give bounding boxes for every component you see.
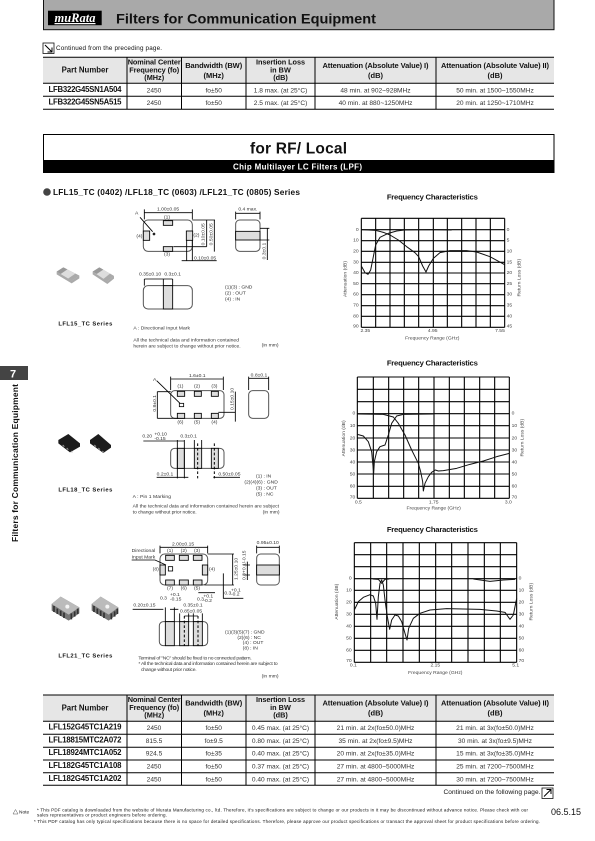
top view: 0.3 bbox=[197, 597, 204, 603]
table row: LFL18924MTC1A052: fo±35 bbox=[205, 750, 222, 758]
table row: LFL18924MTC1A052: LFL18924MTC1A052 bbox=[48, 748, 122, 757]
notes: (in mm) bbox=[263, 510, 280, 516]
table header labels: Insertion Loss bbox=[256, 695, 305, 704]
axis labels: 2.35 bbox=[360, 328, 370, 334]
axis labels: Return Loss (dB) bbox=[517, 258, 523, 297]
top view: -0.2 bbox=[231, 592, 240, 598]
notes: All the technical data and information contained bbox=[133, 337, 239, 343]
table row: LFL182G45TC1A202: 2450 bbox=[147, 776, 162, 784]
panel: LFL18 product and dimensions bbox=[58, 373, 280, 516]
table: LFL parts bbox=[43, 695, 554, 785]
bottom view bbox=[133, 592, 208, 646]
side tab label: Filters for Communication Equipment bbox=[10, 384, 20, 542]
axis labels: 70 bbox=[353, 303, 359, 309]
curves bbox=[354, 579, 517, 640]
terminal legend: (8) : IN bbox=[243, 645, 258, 651]
icon: caution triangle bbox=[13, 810, 18, 814]
page header band bbox=[44, 0, 554, 30]
table row: LFB322G45SN5A515: fo±50 bbox=[205, 100, 222, 107]
table row: LFL182G45TC1A202: 27 min. at 4800~5000MHz bbox=[337, 776, 414, 784]
axis labels: Attenuation (dB) bbox=[343, 261, 349, 297]
top view: (2) bbox=[194, 384, 200, 390]
axis labels: Attenuation (dB) bbox=[341, 420, 347, 456]
bottom view: -0.15 bbox=[170, 597, 182, 603]
top view: +0.1 bbox=[231, 587, 241, 593]
notes bbox=[138, 655, 279, 679]
top view: A bbox=[153, 377, 157, 383]
axis labels: 10 bbox=[507, 249, 512, 255]
axis labels: 0 bbox=[353, 411, 356, 417]
label: LFL15 series: LFL15_TC Series bbox=[58, 321, 112, 327]
axis labels: 70 bbox=[346, 658, 352, 664]
notes: A : Directional Input Mark bbox=[133, 325, 190, 331]
side view: 0.95±0.10 bbox=[257, 540, 279, 546]
bottom view bbox=[142, 431, 241, 478]
panel: LFL15 product and dimensions bbox=[57, 206, 279, 350]
table header labels: (dB) bbox=[488, 709, 503, 718]
axis labels: 20 bbox=[350, 435, 356, 441]
notes: A : Pin 1 Marking bbox=[133, 494, 171, 500]
top view: (3) bbox=[164, 251, 170, 257]
label: LFL18 series: LFL18_TC Series bbox=[58, 487, 112, 493]
date stamp: 06.5.15 bbox=[551, 807, 581, 817]
footer note: * This PDF catalog has only typical specifications because there is no space for detailed specifications. Therefore, please approve our product specifications or transact the approval sheet for product specifications before ordering. bbox=[34, 819, 540, 824]
table row: LFL152G45TC1A219 bbox=[48, 722, 534, 732]
table row: LFB322G45SN5A515: 40 min. at 880~1250MHz bbox=[339, 100, 412, 107]
top view: A bbox=[135, 211, 139, 217]
axis labels: Frequency Range (GHz) bbox=[405, 336, 460, 342]
top view: 1.25±0.10 bbox=[233, 558, 239, 580]
table header labels: (MHz) bbox=[203, 71, 224, 80]
axis labels: 20 bbox=[353, 249, 359, 255]
table row: LFL182G45TC1A108: 27 min. at 4800~5000MHz bbox=[337, 764, 414, 770]
notes: herein are subject to change without prior notice. bbox=[133, 344, 241, 350]
axis labels: 45 bbox=[507, 324, 512, 330]
table row: LFB322G45SN5A515: 20 min. at 1250~1710MHz bbox=[456, 100, 534, 107]
table header labels: Part Number bbox=[62, 703, 108, 712]
logo: muRata: muRata bbox=[54, 11, 96, 25]
terminal legend: (3) : OUT bbox=[256, 485, 277, 491]
side view bbox=[236, 206, 269, 260]
terminal legend: (1)(3) : GND bbox=[225, 285, 253, 291]
table header labels: Attenuation (Absolute Value) II) bbox=[441, 699, 550, 708]
axis labels: Attenuation (dB) bbox=[334, 583, 340, 620]
series heading with bullet: LFL15_TC (0402) /LFL18_TC (0603) /LFL21_TC (0805) Series bbox=[53, 187, 300, 197]
axis labels: 0 bbox=[519, 576, 522, 582]
axis labels: 60 bbox=[353, 292, 359, 298]
photo: LFL15 chips bbox=[57, 267, 114, 284]
top view: (5) bbox=[194, 419, 200, 425]
table header labels: (dB) bbox=[368, 709, 383, 718]
bottom view: 0.3±0.1 bbox=[180, 434, 197, 440]
notes: (in mm) bbox=[262, 343, 279, 349]
axis labels: 80 bbox=[353, 313, 359, 319]
top view: 0.15±0.10 bbox=[229, 388, 235, 410]
bottom view: +0.1 bbox=[170, 592, 180, 598]
notes: to change without prior notice. bbox=[133, 510, 197, 516]
top view: (5) bbox=[194, 586, 200, 592]
top view: 1.00±0.05 bbox=[157, 206, 179, 212]
axis labels: 10 bbox=[519, 588, 524, 594]
axis labels: 0.5 bbox=[355, 499, 362, 505]
table row: LFB322G45SN1A504 bbox=[48, 85, 534, 94]
terminal legend: (2)(4)(6) : GND bbox=[244, 480, 278, 486]
top view: -0.2 bbox=[203, 598, 212, 604]
continued from preceding page note: Continued from the preceding page. bbox=[56, 45, 162, 52]
terminal legend bbox=[225, 285, 253, 302]
terminal legend bbox=[225, 629, 265, 651]
top view: 0.8±0.1 bbox=[152, 395, 158, 412]
footer note: * This PDF catalog is downloaded from the website of Murata Manufacturing co., ltd. Therefore, it's specifications are subject to change or our products in it may be discontinued without advance notice. Please check with our bbox=[37, 808, 529, 812]
panel: LFL21 frequency chart bbox=[334, 525, 535, 676]
axis labels: 10 bbox=[512, 423, 517, 429]
terminal legend: (2)(6) : NC bbox=[237, 635, 261, 641]
top view: (3) bbox=[194, 548, 200, 554]
axis labels: 30 bbox=[507, 292, 512, 298]
table header labels: (dB) bbox=[273, 710, 288, 720]
table row: LFL182G45TC1A108: 25 min. at 7200~7500MHz bbox=[456, 764, 534, 770]
bottom view: 0.35±0.1 bbox=[183, 603, 203, 609]
table row: LFL182G45TC1A202 bbox=[48, 774, 534, 784]
table row: LFB322G45SN1A504: 48 min. at 902~928MHz bbox=[340, 88, 411, 94]
axis labels: 60 bbox=[512, 484, 517, 490]
footer note: Note bbox=[19, 810, 29, 816]
table header labels: Frequency (fo) bbox=[129, 65, 180, 74]
axis labels: 30 bbox=[350, 447, 356, 453]
top view: Input Mark bbox=[132, 555, 156, 561]
table header labels: Bandwidth (BW) bbox=[185, 61, 243, 70]
axis labels: 70 bbox=[350, 495, 356, 501]
axis labels: 70 bbox=[519, 658, 524, 664]
axis labels: Frequency Range (GHz) bbox=[408, 670, 463, 676]
panel: LFL21 product and dimensions bbox=[52, 540, 279, 679]
axis labels: 35 bbox=[507, 303, 512, 309]
top view: Directional bbox=[132, 548, 155, 554]
top view: (4) bbox=[211, 419, 218, 425]
table row: LFL18815MTC2A072: 0.80 max. (at 25°C) bbox=[252, 737, 309, 745]
table header labels: (dB) bbox=[273, 73, 288, 82]
axis labels: 60 bbox=[519, 648, 524, 654]
continued on following page note bbox=[444, 788, 553, 798]
top view: 0.50±0.05 bbox=[209, 223, 215, 245]
curves bbox=[361, 230, 505, 274]
axis labels: 50 bbox=[346, 636, 352, 642]
side view bbox=[249, 373, 269, 418]
top view: (1) bbox=[164, 214, 170, 220]
table row: LFL18815MTC2A072: 35 min. at 2x(fo±9.5)MHz bbox=[339, 738, 412, 745]
bottom view: 0.35±0.10 bbox=[139, 272, 161, 278]
side view bbox=[257, 540, 279, 585]
axis labels: 40 bbox=[519, 624, 524, 630]
side view: 0.8±0.1 bbox=[251, 373, 267, 379]
axis labels: 30 bbox=[346, 612, 352, 618]
terminal legend: (2) : OUT bbox=[225, 291, 246, 297]
bottom view: 0.20±0.15 bbox=[133, 603, 156, 609]
axis labels: 5 bbox=[507, 238, 510, 244]
table header labels: Bandwidth (BW) bbox=[185, 699, 243, 708]
top view: (3) bbox=[211, 384, 218, 390]
axis labels: 30 bbox=[353, 259, 359, 265]
top view: (6) bbox=[181, 586, 187, 592]
table header labels: Attenuation (Absolute Value) I) bbox=[322, 61, 429, 70]
table row: LFL18924MTC1A052 bbox=[48, 748, 534, 758]
chart title: Frequency Characteristics bbox=[387, 192, 478, 201]
axis labels: 15 bbox=[507, 259, 512, 265]
section title box: for RF/ Local bbox=[43, 134, 554, 173]
grid bbox=[361, 218, 505, 327]
table row: LFB322G45SN5A515: 2.5 max. (at 25°C) bbox=[254, 99, 307, 107]
axis labels: 1.75 bbox=[429, 499, 439, 505]
axis labels bbox=[343, 227, 523, 342]
top view bbox=[152, 373, 235, 425]
label: LFL21 series: LFL21_TC Series bbox=[58, 653, 112, 659]
section title box: for RF/ Local: for RF/ Local bbox=[250, 140, 347, 158]
axis labels: 50 bbox=[519, 636, 524, 642]
table header labels bbox=[62, 58, 550, 82]
table row: LFL182G45TC1A202: LFL182G45TC1A202 bbox=[48, 774, 122, 783]
top view: 0.3 bbox=[224, 591, 231, 597]
table header labels: in BW bbox=[270, 703, 291, 712]
axis labels: Return Loss (dB) bbox=[519, 418, 525, 457]
terminal legend: (1) : IN bbox=[256, 474, 272, 480]
top view: (4) bbox=[136, 233, 143, 239]
notes: Terminal of "NC" should be fixed to no connected pattern. bbox=[138, 655, 252, 661]
top view: (1) bbox=[177, 384, 184, 390]
top view: 0.10±0.05 bbox=[194, 255, 216, 261]
table row: LFL18815MTC2A072 bbox=[48, 736, 532, 745]
axis labels: 50 bbox=[350, 471, 356, 477]
table row: LFL152G45TC1A219: fo±50 bbox=[205, 725, 222, 732]
top view: (2) bbox=[193, 233, 200, 239]
terminal legend: (1)(3)(5)(7) : GND bbox=[225, 629, 265, 635]
axis labels: Return Loss (dB) bbox=[529, 582, 535, 621]
axis labels: 70 bbox=[512, 495, 517, 501]
table header labels: Attenuation (Absolute Value) II) bbox=[441, 61, 550, 70]
notes: change without prior notice. bbox=[141, 667, 197, 673]
table row: LFL18924MTC1A052: 20 min. at 2x(fo±35.0)MHz bbox=[337, 750, 414, 758]
axis labels bbox=[341, 411, 525, 512]
table row: LFL18815MTC2A072: LFL18815MTC2A072 bbox=[48, 736, 122, 744]
terminal legend bbox=[244, 474, 278, 497]
table row: LFL18924MTC1A052: 15 min. at 3x(fo±35.0)MHz bbox=[456, 750, 534, 758]
bottom view: 0.50±0.05 bbox=[218, 471, 241, 477]
axis labels: 0 bbox=[349, 576, 352, 582]
table header labels: (MHz) bbox=[144, 73, 165, 82]
notes: * All the technical data and information contained herein are subject to bbox=[138, 661, 278, 667]
axis labels: 3.0 bbox=[505, 499, 512, 505]
axis labels: 40 bbox=[353, 270, 359, 276]
table row: LFL182G45TC1A108 bbox=[48, 761, 534, 770]
table header labels: (MHz) bbox=[203, 709, 224, 718]
table row: LFL182G45TC1A108: 2450 bbox=[147, 764, 162, 770]
terminal legend: (5) : NC bbox=[256, 491, 274, 497]
axis labels: 20 bbox=[512, 435, 517, 441]
axis labels: 40 bbox=[507, 313, 512, 319]
table row: LFL182G45TC1A202: 0.40 max. (at 25°C) bbox=[252, 776, 309, 784]
grid bbox=[357, 377, 509, 498]
axis labels bbox=[334, 576, 535, 676]
notes: (in mm) bbox=[262, 673, 279, 679]
table row: LFL18815MTC2A072: 30 min. at 3x(fo±9.5)MHz bbox=[458, 738, 532, 745]
curves bbox=[357, 414, 509, 491]
table row: LFL182G45TC1A202: fo±50 bbox=[205, 776, 222, 784]
table row: LFL152G45TC1A219: 2450 bbox=[147, 725, 162, 732]
axis labels: 5.1 bbox=[512, 662, 519, 668]
bottom view: 0.2±0.1 bbox=[157, 471, 173, 477]
axis labels: 0 bbox=[356, 227, 359, 233]
table row: LFL182G45TC1A202: 30 min. at 7200~7500MHz bbox=[456, 776, 534, 784]
notes bbox=[133, 494, 280, 516]
top view: 2.00±0.15 bbox=[172, 541, 194, 547]
axis labels: 50 bbox=[512, 471, 517, 477]
table row: LFL152G45TC1A219: 0.45 max. (at 25°C) bbox=[252, 724, 309, 732]
panel: LFL18 frequency chart bbox=[341, 359, 525, 512]
table header labels: (dB) bbox=[368, 71, 383, 80]
table header labels bbox=[62, 695, 550, 720]
top view: 0.3+0.1/-0.15 bbox=[241, 550, 247, 580]
notes: All the technical data and information contained herein are subject bbox=[133, 504, 280, 510]
top view: (2) bbox=[181, 548, 187, 554]
bottom view: 0.3±0.1 bbox=[164, 272, 181, 278]
axis labels: Frequency Range (GHz) bbox=[407, 506, 461, 512]
axis labels: 50 bbox=[353, 281, 359, 287]
axis labels: 30 bbox=[519, 612, 524, 618]
photo: LFL21 chips bbox=[52, 597, 118, 621]
axis labels: 20 bbox=[507, 270, 512, 276]
axis labels: 25 bbox=[507, 281, 512, 287]
table row: LFL152G45TC1A219: 21 min. at 3x(fo±50.0)MHz bbox=[456, 725, 534, 732]
table header labels: Attenuation (Absolute Value) I) bbox=[322, 699, 429, 708]
axis labels: 60 bbox=[346, 648, 352, 654]
table header labels: Insertion Loss bbox=[256, 58, 305, 66]
table: LFB322 parts bbox=[43, 57, 554, 109]
table row: LFB322G45SN5A515 bbox=[48, 98, 534, 107]
table row: LFB322G45SN5A515: 2450 bbox=[147, 100, 162, 107]
axis labels: 0.1 bbox=[350, 662, 357, 668]
table row: LFL18815MTC2A072: fo±9.5 bbox=[205, 738, 223, 745]
table row: LFL182G45TC1A108: fo±50 bbox=[205, 764, 222, 770]
bottom view: -0.15 bbox=[154, 436, 166, 442]
bottom view: +0.10 bbox=[154, 431, 167, 437]
side tab: chapter 7 bbox=[0, 366, 28, 380]
table header labels: Nominal Center bbox=[128, 695, 181, 704]
table row: LFB322G45SN1A504: 1.8 max. (at 25°C) bbox=[254, 86, 307, 94]
table row: LFL18924MTC1A052: 924.5 bbox=[146, 750, 163, 758]
axis labels: 40 bbox=[512, 459, 517, 465]
panel: LFL15 frequency chart bbox=[343, 192, 523, 342]
axis labels: 20 bbox=[519, 600, 524, 606]
table header labels: (MHz) bbox=[144, 710, 165, 720]
table header labels: in BW bbox=[270, 65, 291, 74]
table row: LFB322G45SN5A515: LFB322G45SN5A515 bbox=[48, 98, 122, 106]
table row: LFL18815MTC2A072: 815.5 bbox=[146, 738, 163, 745]
footer note: sales representatives or product engineers before ordering. bbox=[37, 812, 167, 818]
table row: LFB322G45SN1A504: LFB322G45SN1A504 bbox=[48, 85, 122, 94]
table row: LFB322G45SN1A504: fo±50 bbox=[205, 88, 222, 94]
top view bbox=[132, 541, 250, 604]
table row: LFB322G45SN1A504: 2450 bbox=[147, 88, 162, 94]
photo: LFL18 chips bbox=[58, 434, 111, 453]
axis labels: 20 bbox=[346, 600, 352, 606]
footer note bbox=[13, 808, 540, 824]
table header labels: Nominal Center bbox=[128, 58, 181, 66]
chart title: Frequency Characteristics bbox=[387, 525, 478, 534]
table row: LFL152G45TC1A219: LFL152G45TC1A219 bbox=[48, 722, 122, 732]
top view: (7) bbox=[167, 586, 173, 592]
table row: LFL182G45TC1A108: LFL182G45TC1A108 bbox=[48, 761, 122, 770]
section title box: for RF/ Local: Chip Multilayer LC Filters (LPF) bbox=[233, 162, 362, 172]
axis labels: 4.95 bbox=[428, 328, 438, 334]
axis labels: 40 bbox=[350, 459, 356, 465]
bottom view bbox=[139, 272, 192, 309]
axis labels: 0 bbox=[507, 227, 510, 233]
notes bbox=[133, 325, 279, 350]
top view: +0.1 bbox=[203, 593, 213, 599]
table row: LFL152G45TC1A219: 21 min. at 2x(fo±50.0)MHz bbox=[337, 725, 414, 732]
side view: 0.4 max. bbox=[238, 206, 257, 212]
top view: (4) bbox=[209, 567, 215, 573]
axis labels: 2.15 bbox=[430, 662, 440, 668]
axis labels: 30 bbox=[512, 447, 517, 453]
terminal legend: (4) : OUT bbox=[243, 640, 263, 646]
table row: LFL182G45TC1A108: 0.37 max. (at 25°C) bbox=[252, 762, 309, 770]
top view: (1) bbox=[167, 548, 173, 554]
bottom view: 0.85±0.05 bbox=[180, 609, 202, 615]
table row: LFL18924MTC1A052: 0.40 max. (at 25°C) bbox=[252, 750, 309, 758]
side tab: chapter 7: 7 bbox=[10, 368, 16, 380]
axis labels: 10 bbox=[346, 588, 352, 594]
table header labels: (dB) bbox=[488, 71, 503, 80]
chart title: Frequency Characteristics bbox=[387, 359, 478, 368]
axis labels: 10 bbox=[350, 423, 356, 429]
top view: 0.10±0.05 bbox=[201, 223, 207, 245]
axis labels: 90 bbox=[353, 324, 359, 330]
axis labels: 7.55 bbox=[495, 328, 505, 334]
header title: Filters for Communication Equipment bbox=[116, 10, 376, 26]
axis labels: 10 bbox=[353, 238, 359, 244]
terminal legend: (4) : IN bbox=[225, 296, 241, 302]
top view: (6) bbox=[177, 419, 184, 425]
table header labels: Part Number bbox=[62, 66, 108, 74]
bottom view: 0.20 bbox=[142, 434, 152, 440]
continued from preceding page note bbox=[43, 43, 162, 54]
table row: LFB322G45SN1A504: 50 min. at 1500~1550MHz bbox=[456, 88, 534, 94]
top view bbox=[135, 206, 217, 261]
table header labels: Frequency (fo) bbox=[129, 703, 180, 712]
side view: 0.3±0.1 bbox=[261, 243, 267, 259]
axis labels: 0 bbox=[512, 411, 515, 417]
top view: 1.6±0.1 bbox=[189, 373, 206, 379]
top view: (8) bbox=[153, 567, 159, 573]
grid bbox=[354, 543, 517, 662]
bottom view: 0.3 bbox=[160, 595, 167, 601]
axis labels: 60 bbox=[350, 484, 356, 490]
continued on following page note: Continued on the following page. bbox=[444, 789, 541, 796]
axis labels: 40 bbox=[346, 624, 352, 630]
